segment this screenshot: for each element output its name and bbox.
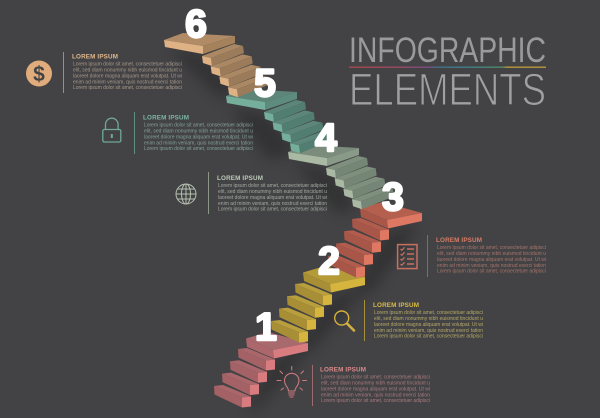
icon: padlock xyxy=(103,118,121,142)
body: laoreet dolore magna aliquam erat volutpat. Ut wi xyxy=(73,74,182,80)
heading: LOREM IPSUM xyxy=(143,114,189,122)
number 1: 1 xyxy=(255,306,277,349)
body: enim ad minim veniam, quis nostrud exerci tation xyxy=(321,392,430,398)
number 3: 3 xyxy=(382,176,404,219)
body: enim ad minim veniam, quis nostrud exerci tation xyxy=(73,79,182,85)
body: Lorem ipsum dolor sit amet, consectetuer adipisci xyxy=(73,61,182,67)
body xyxy=(218,183,327,213)
body xyxy=(73,61,182,91)
heading: LOREM IPSUM xyxy=(72,54,118,60)
body: elit, sed diam nonummy nibh euismod tincidunt u xyxy=(144,128,253,134)
body: enim ad minim veniam, quis nostrud exerci tation xyxy=(437,263,546,269)
body: elit, sed diam nonummy nibh euismod tincidunt u xyxy=(218,189,327,195)
number 2: 2 xyxy=(318,240,340,283)
panel 1: pink text block xyxy=(312,365,430,406)
body: elit, sed diam nonummy nibh euismod tincidunt u xyxy=(437,251,546,257)
body: Lorem ipsum dolor sit amet, consectetuer adipisci xyxy=(144,122,253,128)
body xyxy=(321,374,430,404)
body: enim ad minim veniam, quis nostrud exerci tation xyxy=(144,140,253,146)
icon: dollar coin: $ xyxy=(33,63,45,86)
flight 3: red stairs xyxy=(328,202,422,278)
body: Lorem ipsum dolor sit amet, consectetuer adipisci xyxy=(374,334,483,340)
icon: light bulb xyxy=(277,366,306,397)
icon: dollar coin xyxy=(26,60,52,86)
body: Lorem ipsum dolor sit amet, consectetuer adipisci xyxy=(374,310,483,316)
rule xyxy=(427,235,428,277)
title xyxy=(349,31,546,115)
body: Lorem ipsum dolor sit amet, consectetuer adipisci xyxy=(218,183,327,189)
heading: LOREM IPSUM xyxy=(436,237,482,244)
body: laoreet dolore magna aliquam erat volutpat. Ut wi xyxy=(144,134,253,140)
rainbow divider xyxy=(349,66,546,68)
icon: checklist xyxy=(398,245,417,269)
rule xyxy=(63,52,64,93)
body: Lorem ipsum dolor sit amet, consectetuer adipisci xyxy=(437,245,546,251)
number 6: 6 xyxy=(185,3,207,46)
flight 2: yellow stairs xyxy=(271,266,365,342)
body: laoreet dolore magna aliquam erat volutpat. Ut wi xyxy=(437,257,546,263)
rule xyxy=(364,300,365,341)
heading: LOREM IPSUM xyxy=(373,302,419,309)
body: Lorem ipsum dolor sit amet, consectetuer adipisci xyxy=(73,85,182,91)
heading: LOREM IPSUM xyxy=(320,366,366,374)
body: enim ad minim veniam, quis nostrud exerci tation xyxy=(374,328,483,334)
body: elit, sed diam nonummy nibh euismod tincidunt u xyxy=(321,380,430,386)
icon: globe xyxy=(176,184,196,204)
body: Lorem ipsum dolor sit amet, consectetuer adipisci xyxy=(321,398,430,404)
stair shadows xyxy=(168,48,420,410)
body: Lorem ipsum dolor sit amet, consectetuer adipisci xyxy=(321,374,430,380)
panel 4: sage text block xyxy=(208,172,327,214)
flight 1: pink stairs xyxy=(214,332,308,408)
rule xyxy=(134,112,135,154)
number 5: 5 xyxy=(254,62,276,105)
body xyxy=(437,245,546,275)
title line 2: ELEMENTS xyxy=(349,64,546,115)
flight 6: tan stairs xyxy=(164,33,270,97)
panel 5: teal text block xyxy=(134,112,253,154)
body: Lorem ipsum dolor sit amet, consectetuer adipisci xyxy=(144,146,253,152)
body: enim ad minim veniam, quis nostrud exerci tation xyxy=(218,201,327,207)
rule xyxy=(312,365,313,406)
panel 3: red text block xyxy=(427,235,546,277)
flight 5: teal stairs xyxy=(226,89,332,153)
panel 6: tan text block xyxy=(63,52,182,93)
flight 4: sage stairs xyxy=(288,145,394,209)
body xyxy=(144,122,253,152)
number 4: 4 xyxy=(315,117,337,160)
body: Lorem ipsum dolor sit amet, consectetuer adipisci xyxy=(437,269,546,275)
panel 2: yellow text block xyxy=(364,300,483,341)
body: laoreet dolore magna aliquam erat volutpat. Ut wi xyxy=(374,322,483,328)
body: elit, sed diam nonummy nibh euismod tincidunt u xyxy=(73,68,182,74)
step numbers xyxy=(185,3,404,349)
title line 1: INFOGRAPHIC xyxy=(349,31,546,70)
body: elit, sed diam nonummy nibh euismod tincidunt u xyxy=(374,316,483,322)
rule xyxy=(208,172,209,214)
body xyxy=(374,310,483,340)
heading: LOREM IPSUM xyxy=(217,175,263,182)
body: Lorem ipsum dolor sit amet, consectetuer adipisci xyxy=(218,207,327,213)
body: laoreet dolore magna aliquam erat volutpat. Ut wi xyxy=(321,386,430,392)
body: laoreet dolore magna aliquam erat volutpat. Ut wi xyxy=(218,195,327,201)
icon: magnifier xyxy=(335,311,354,330)
